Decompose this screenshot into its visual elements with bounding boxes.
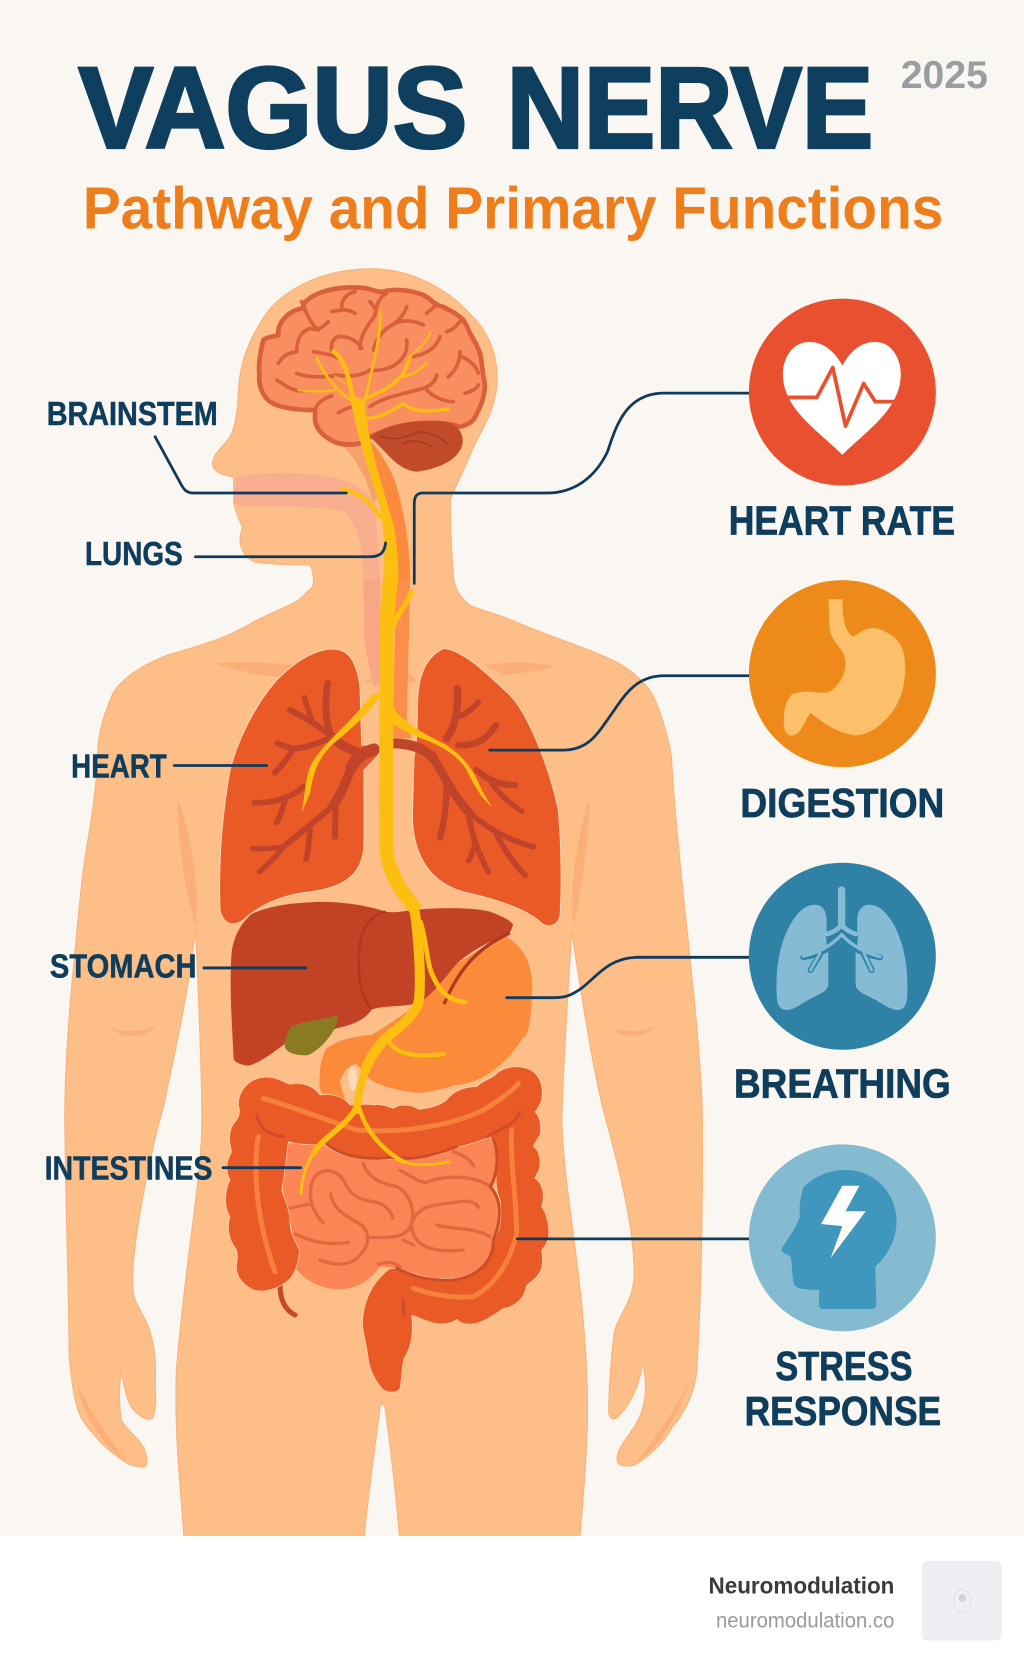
- appendix: [280, 1285, 295, 1315]
- label: stress response: RESPONSE: [745, 1388, 941, 1434]
- icon: stress response: [749, 1144, 936, 1331]
- body silhouette: [65, 269, 702, 1535]
- left lung: [220, 649, 378, 924]
- leader line: heart rate: [414, 393, 749, 583]
- footer logo: [922, 1561, 1002, 1640]
- icon: heart rate: [749, 299, 936, 486]
- label: heart: HEART: [71, 748, 167, 785]
- nerve: abdomen: [365, 908, 420, 1070]
- label: brainstem: BRAINSTEM: [47, 395, 218, 432]
- cerebrum: [259, 287, 485, 444]
- large intestine: [226, 1067, 549, 1392]
- nerve: head and neck: [298, 312, 448, 580]
- icon: digestion: [749, 580, 936, 767]
- leader line: lungs: [195, 543, 386, 557]
- bronchi: [253, 683, 533, 875]
- leader line: stress response: [517, 1238, 749, 1240]
- label: stress response: [745, 1343, 941, 1434]
- small intestine: [283, 1137, 498, 1289]
- cerebellum: [370, 421, 463, 472]
- collarbones: [215, 662, 553, 683]
- leader line: digestion: [490, 676, 749, 750]
- body illustration: [65, 269, 702, 1535]
- vagus nerve pathway: [298, 312, 492, 1193]
- liver: [231, 902, 513, 1066]
- title: VAGUS: [79, 45, 467, 173]
- cerebral folds: [277, 292, 478, 413]
- nerve: liver and stomach branches: [357, 922, 465, 1110]
- colon highlights: [256, 1083, 518, 1297]
- lower esophagus orange: [393, 630, 412, 738]
- label: heart rate: HEART RATE: [729, 497, 955, 543]
- year badge: 2025: [901, 53, 988, 97]
- subtitle: Pathway and Primary Functions: [83, 174, 943, 241]
- leader line: intestines: [223, 1166, 301, 1169]
- intestines: [226, 1066, 549, 1392]
- mid-neck esophagus: [363, 579, 410, 638]
- label: stress response: STRESS: [775, 1343, 912, 1389]
- right lung: [412, 648, 561, 926]
- colon shading: [257, 1112, 520, 1315]
- lower esophagus: [364, 630, 381, 688]
- brain and cerebellum: [259, 287, 485, 472]
- lungs: [215, 630, 561, 926]
- nerve: intestine branches: [301, 1107, 450, 1193]
- throat and esophagus: [233, 440, 410, 580]
- gallbladder: [285, 1015, 338, 1055]
- stomach organ: [320, 935, 532, 1103]
- leader line: breathing: [507, 957, 749, 998]
- nerve: neck segment: [387, 574, 411, 643]
- icon: breathing: [749, 863, 936, 1050]
- label: intestines: INTESTINES: [45, 1149, 212, 1186]
- footer brand name: Neuromodulation: [709, 1573, 894, 1599]
- footer url: neuromodulation.co: [716, 1609, 894, 1633]
- cerebellum folds: [382, 432, 447, 447]
- leader line: heart: [174, 764, 267, 767]
- label: stomach: STOMACH: [50, 947, 197, 985]
- label: digestion: DIGESTION: [740, 780, 944, 826]
- leader line: stomach: [204, 967, 306, 969]
- label: lungs: LUNGS: [85, 535, 183, 572]
- skin shading details: [76, 799, 688, 1462]
- nerve: thorax: [302, 627, 492, 910]
- duodenum highlight: [348, 1066, 357, 1091]
- label: breathing: BREATHING: [734, 1061, 951, 1107]
- title: NERVE: [507, 45, 873, 173]
- title: [79, 45, 873, 173]
- leader line: brainstem: [155, 437, 346, 493]
